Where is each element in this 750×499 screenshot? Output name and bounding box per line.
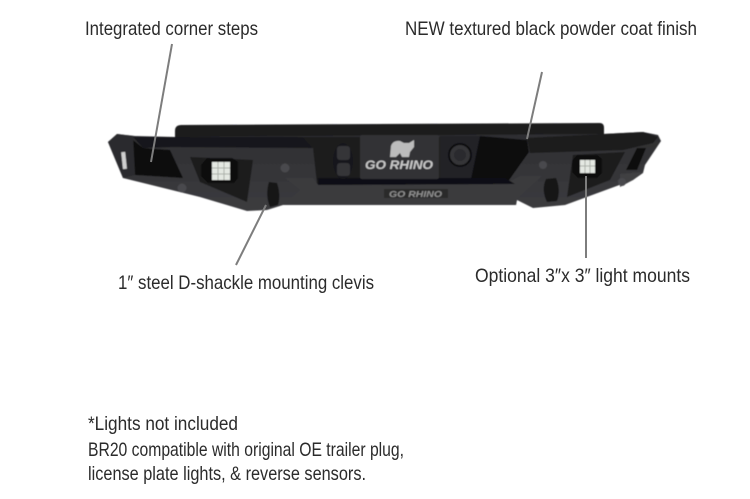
leader: light mounts	[585, 176, 587, 258]
right bolt caps	[539, 161, 626, 186]
right light pod	[572, 155, 602, 178]
plate logo text: GO RHINO	[365, 158, 434, 172]
centre panel	[303, 137, 480, 184]
crossbar logo strip	[384, 189, 448, 198]
left corner tip	[108, 134, 135, 178]
right corner hook	[620, 172, 643, 187]
leader: powder coat	[527, 72, 542, 139]
lower crossbar	[283, 176, 542, 205]
top dark band right	[527, 132, 658, 153]
right light panel	[567, 152, 625, 197]
step highlight	[121, 152, 127, 169]
footnote line 3: license plate lights, & reverse sensors.	[88, 463, 366, 485]
license plate panel	[360, 135, 439, 179]
left corner step	[133, 140, 183, 178]
right light lens	[580, 160, 595, 173]
label: powder coat: NEW textured black powder coat finish	[405, 18, 697, 40]
right dark recess	[470, 136, 529, 184]
wiring plug	[333, 143, 353, 179]
bumper product image	[108, 123, 661, 211]
leader: corner steps	[151, 44, 172, 162]
label: light mounts: Optional 3″x 3″ light mounts	[475, 265, 690, 287]
left bolt caps	[178, 164, 290, 192]
left light lens	[212, 162, 230, 180]
sensor panel	[440, 136, 480, 184]
crossbar recess	[318, 178, 515, 185]
crossbar logo: GO RHINO	[389, 189, 442, 199]
rhino logo	[390, 140, 414, 157]
label: D-shackle: 1″ steel D-shackle mounting clevis	[118, 272, 374, 294]
right corner opening	[626, 148, 646, 170]
right D-shackle clevis	[544, 178, 559, 202]
left light panel	[190, 157, 253, 202]
footnote	[88, 413, 404, 485]
leader: D-shackle	[236, 205, 266, 265]
left D-shackle clevis	[267, 182, 279, 207]
reverse sensor	[449, 144, 471, 166]
label: corner steps: Integrated corner steps	[85, 18, 258, 40]
footnote line 1: *Lights not included	[88, 413, 238, 435]
upper rear plate	[175, 123, 604, 140]
left light pod	[201, 158, 238, 183]
top dark band left	[133, 137, 313, 148]
footnote line 2: BR20 compatible with original OE trailer plug,	[88, 439, 404, 461]
bumper main body	[108, 132, 661, 211]
